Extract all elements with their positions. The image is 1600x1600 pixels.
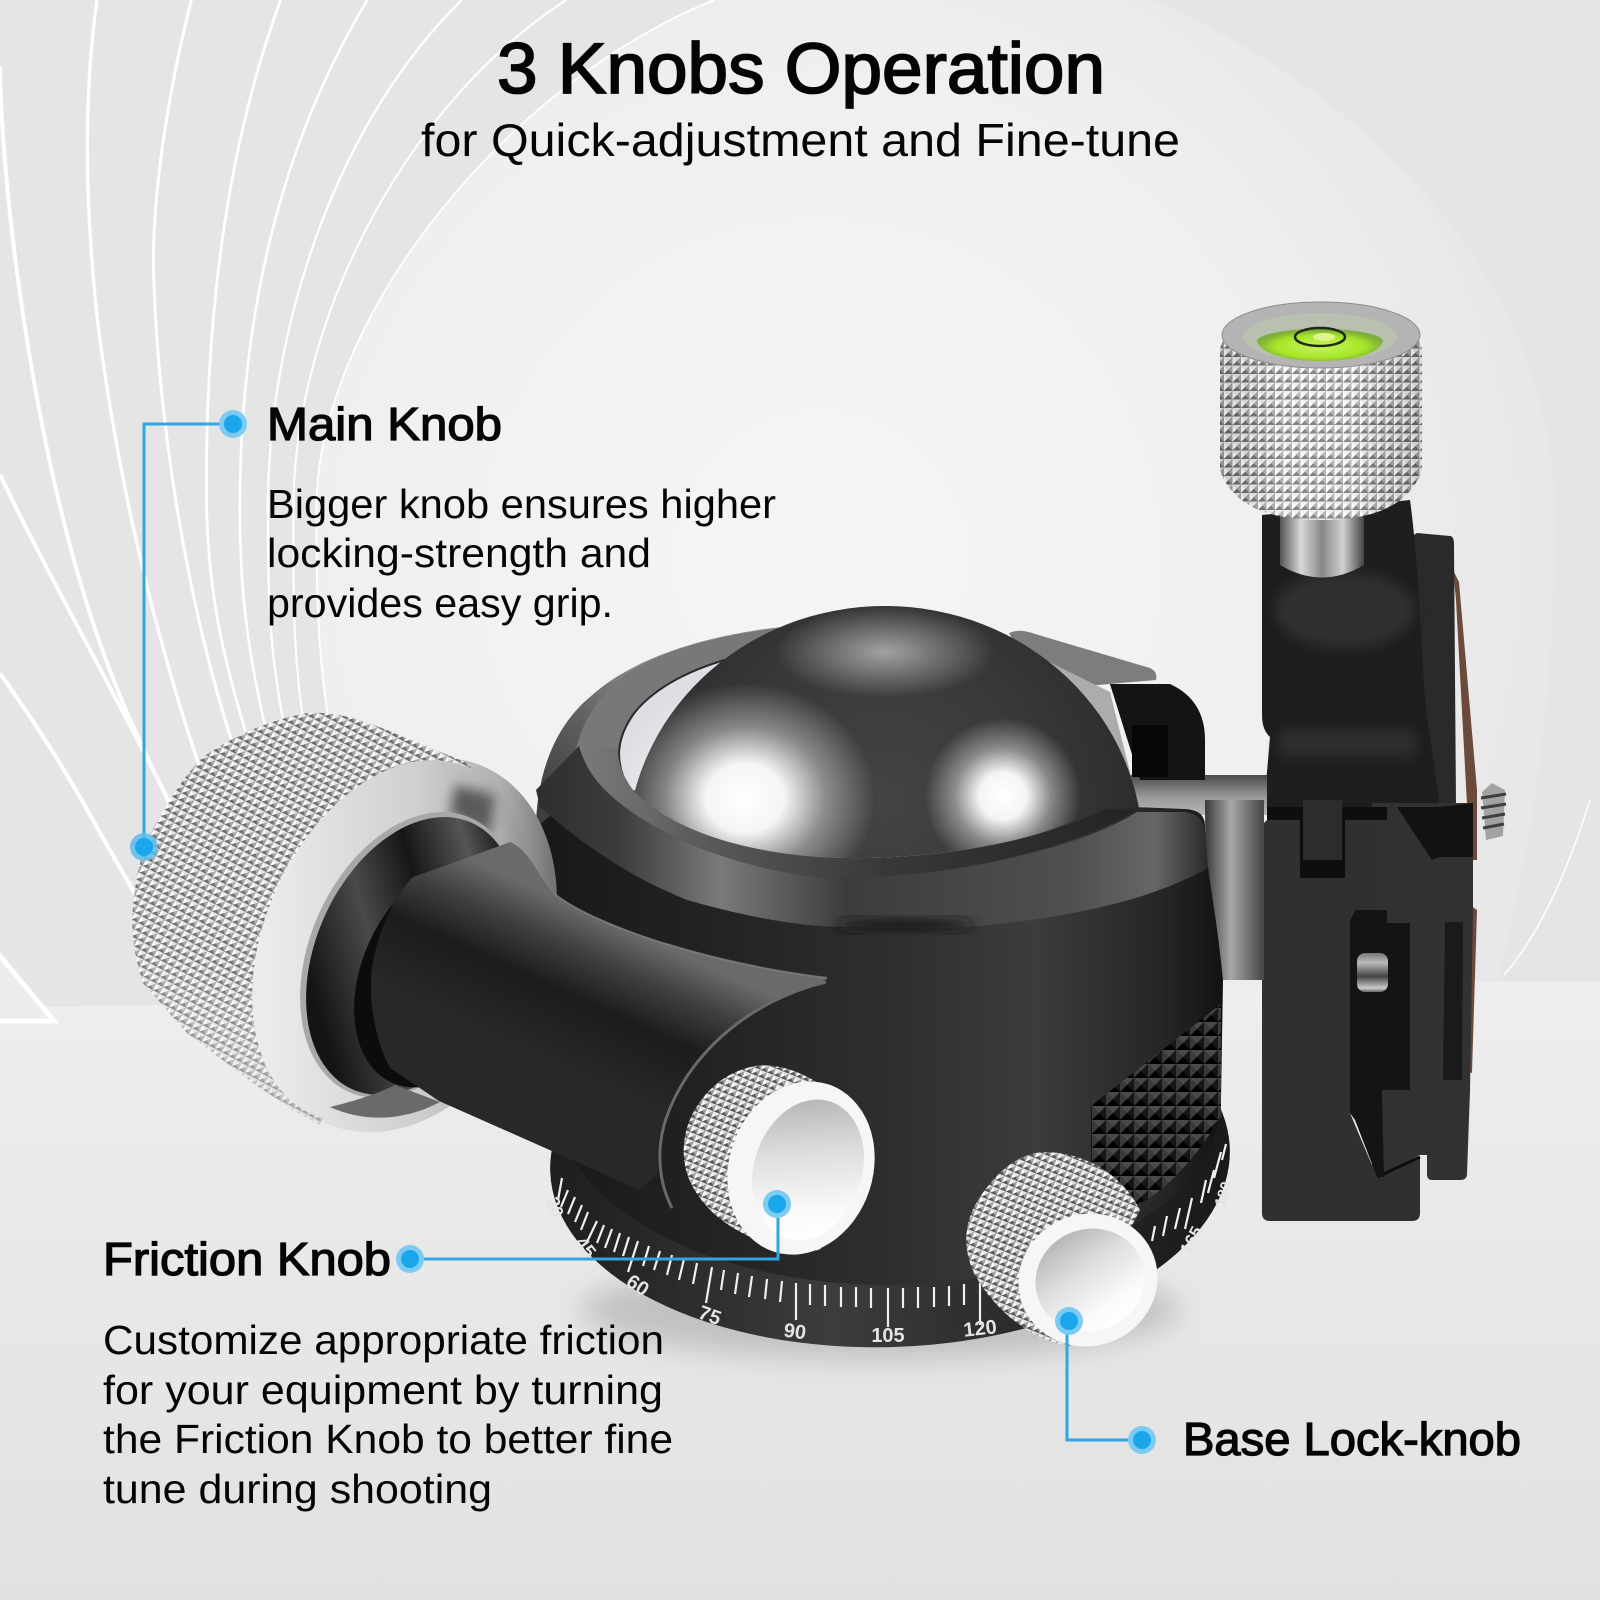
clamp: brown pad edge — [1453, 570, 1477, 1130]
main knob: bezel dark reflection — [450, 785, 495, 835]
product: clamp assembly — [1262, 500, 1506, 1221]
heading: friction knob: Friction Knob — [103, 1233, 391, 1285]
main knob — [132, 712, 557, 1132]
leader line: friction knob — [410, 1204, 778, 1259]
dial numbers: 45 — [570, 1233, 600, 1263]
callout: main knob — [130, 398, 776, 861]
rear latch plate — [1009, 631, 1156, 690]
callout: base lock-knob — [1055, 1307, 1521, 1465]
base lock knob: knurled barrel — [966, 1152, 1140, 1346]
friction knob — [684, 1062, 897, 1274]
friction knob: recess — [734, 1085, 882, 1255]
heading: base lock-knob: Base Lock-knob — [1183, 1413, 1521, 1465]
callout: friction knob — [103, 1190, 791, 1512]
dial numbers: 180 — [1212, 1180, 1235, 1209]
floor shadow beneath the head — [580, 1260, 1180, 1360]
clamp: T-slot gap — [1267, 807, 1387, 878]
subtitle: for Quick-adjustment and Fine-tune — [421, 114, 1180, 166]
body cylinder — [533, 775, 1223, 1285]
ball head: collar, latch and ball — [536, 606, 1205, 858]
dot: base lock-knob target — [1055, 1307, 1083, 1335]
clamp: arm sheen — [1275, 572, 1415, 648]
heading: main knob: Main Knob — [267, 398, 502, 450]
collar outer ring — [536, 626, 900, 900]
dial numbers: 105 — [871, 1325, 905, 1347]
clamp: right slot — [1443, 922, 1463, 1080]
dial ring — [544, 961, 1236, 1359]
background: right arc — [1504, 800, 1590, 975]
base lock knob — [966, 1152, 1176, 1366]
white seat ring — [619, 656, 800, 800]
dot: friction knob target — [763, 1190, 791, 1218]
clamp: right block — [1372, 803, 1473, 1180]
arm: top highlight — [553, 893, 827, 978]
level knob: barrel shading — [1220, 322, 1422, 520]
base lock knob: white face — [1000, 1194, 1176, 1366]
body: dark lip — [578, 742, 1137, 878]
text: main knob description: provides easy grip. — [267, 580, 613, 626]
text: friction knob description: for your equipment by turning — [103, 1367, 663, 1413]
leader line: base lock-knob — [1067, 1321, 1142, 1440]
body upper chamfer band — [536, 745, 1208, 928]
clamp: latch pin — [1357, 953, 1388, 992]
level knob: knurled barrel — [1220, 322, 1422, 520]
friction knob: knurled barrel — [684, 1065, 870, 1251]
dial base with scale — [542, 961, 1236, 1359]
horizontal shaft — [1127, 775, 1267, 815]
dot: base lock-knob label — [1128, 1426, 1156, 1454]
leader line: main knob — [144, 424, 233, 847]
background: lower-left triangle line — [0, 950, 54, 1021]
neck and horizontal shaft — [1127, 775, 1267, 980]
text: main knob description: Bigger knob ensures higher — [267, 481, 776, 527]
dial numbers: 120 — [962, 1316, 998, 1342]
rear latch slot — [1132, 725, 1168, 777]
level knob: silver rim — [1222, 302, 1420, 368]
ball head: main body — [533, 742, 1223, 1285]
clamp: shoulder sheen — [1280, 730, 1415, 756]
rear latch block — [1110, 684, 1205, 780]
screw — [1481, 783, 1506, 840]
dot: main knob label — [219, 410, 247, 438]
dial numbers: 60 — [622, 1271, 653, 1301]
text: main knob description: locking-strength and — [267, 530, 651, 576]
level knob: steel pin — [1280, 505, 1364, 578]
dial numbers: 165 — [1176, 1223, 1206, 1257]
text: friction knob description: Customize appropriate friction — [103, 1317, 664, 1363]
clamp: latch slot — [1350, 910, 1410, 1177]
main knob: lower bezel lip — [330, 1085, 440, 1118]
main knob: knurled barrel — [132, 712, 472, 1124]
dot: friction knob label — [396, 1245, 424, 1273]
main knob: metallic inner ring — [265, 784, 559, 1128]
clamp: rear plate — [1400, 533, 1456, 812]
arm: end cap around friction knob — [657, 980, 900, 1270]
horizontal arm — [371, 842, 900, 1270]
dial numbers: 30 — [542, 1194, 568, 1220]
dial numbers: 90 — [782, 1320, 807, 1344]
title: 3 Knobs Operation — [497, 30, 1105, 109]
arm: cap highlight — [660, 982, 826, 1208]
main knob: opening rim — [258, 777, 562, 1133]
text: main knob description — [267, 481, 776, 626]
level knob: green bubble vial — [1243, 313, 1397, 361]
dial numbers: 75 — [695, 1302, 724, 1330]
friction knob: white face — [705, 1062, 897, 1274]
base lock knob: recess — [1021, 1213, 1159, 1347]
grey wedge beside ball — [1035, 655, 1132, 780]
main knob: black groove — [321, 835, 559, 1115]
dot: main knob target — [130, 833, 158, 861]
level knob — [1220, 302, 1422, 578]
dial ticks — [558, 1144, 1226, 1327]
main knob: silver bezel — [199, 717, 581, 1165]
body: underside shadow patch — [835, 919, 975, 931]
background: light central circle — [316, 0, 1555, 1010]
clamp: lower latch edge — [1377, 1157, 1420, 1177]
dial numbers — [542, 1180, 1235, 1347]
clamp: T tongue — [1303, 800, 1342, 860]
background: concentric white arcs — [0, 0, 714, 903]
main knob: rear bezel — [196, 709, 614, 1181]
clamp: upper arm — [1262, 500, 1440, 812]
ball — [634, 606, 1139, 858]
clamp: right block upper shade — [1397, 803, 1473, 860]
neck — [1205, 800, 1264, 980]
text: friction knob description — [103, 1317, 673, 1512]
body: knurled grip band — [1091, 1004, 1221, 1215]
text: friction knob description: the Friction Knob to better fine — [103, 1416, 673, 1462]
clamp: main lower block — [1262, 820, 1420, 1221]
text: friction knob description: tune during shooting — [103, 1466, 492, 1512]
collar inner band — [576, 627, 900, 820]
floor — [0, 981, 1600, 1600]
